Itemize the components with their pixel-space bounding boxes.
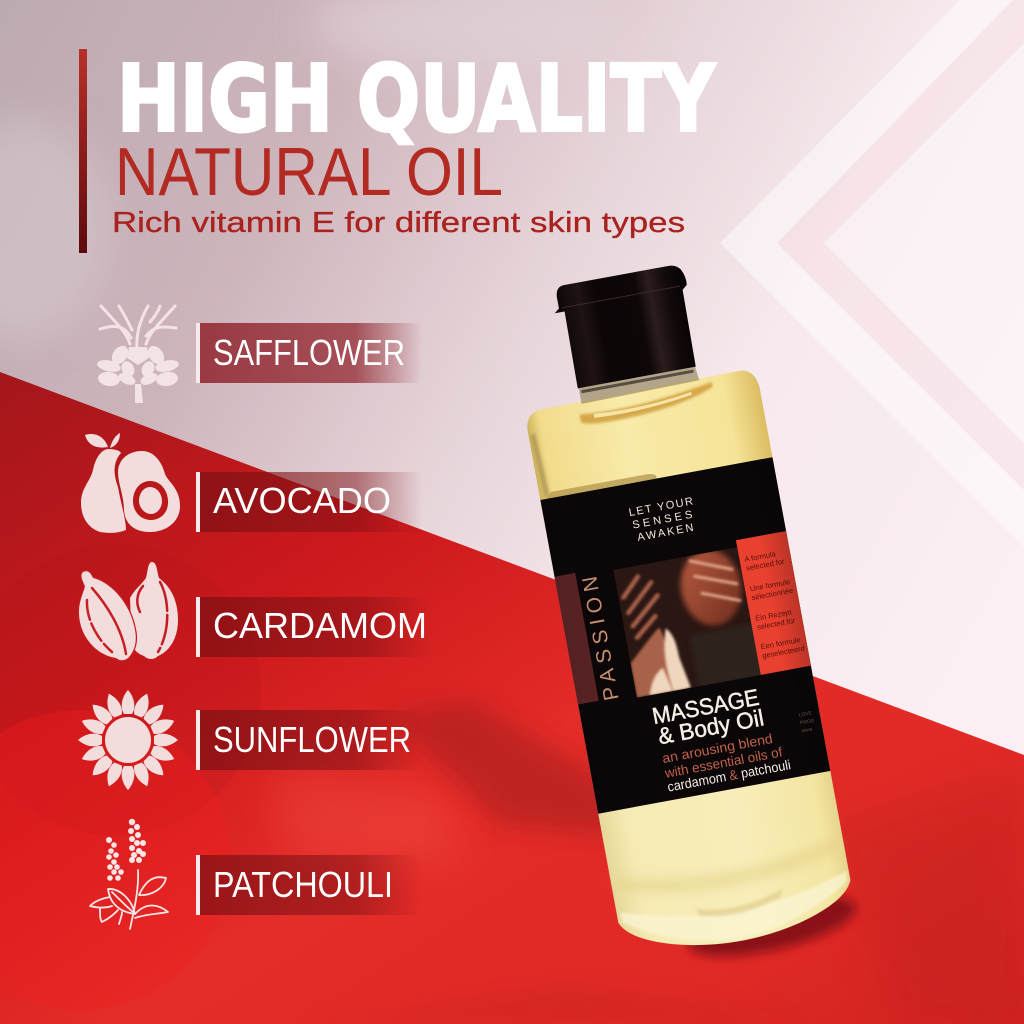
label bar: avocado	[196, 472, 422, 532]
label: description	[660, 729, 792, 795]
icon: avocado	[81, 433, 180, 533]
label bar: sunflower	[196, 710, 422, 770]
icon: sunflower	[78, 690, 178, 790]
label: multilingual red panel: Ein Rezept	[755, 607, 793, 623]
label: side small print	[798, 710, 817, 734]
bottle body	[521, 354, 858, 962]
label: product name: MASSAGE	[650, 684, 761, 729]
label: description: cardamom & patchouli	[666, 757, 792, 795]
ingredient: cardamom	[79, 562, 432, 660]
label: side small print: www	[801, 726, 813, 734]
label: multilingual red panel: selected für	[756, 616, 796, 632]
label: photo	[614, 547, 760, 698]
title block	[79, 46, 716, 253]
ingredient: avocado	[81, 433, 422, 533]
icon: patchouli	[90, 819, 168, 929]
label bar: patchouli	[196, 855, 422, 915]
label: description: an arousing blend	[661, 731, 774, 766]
label: product name: & Body Oil	[656, 704, 766, 749]
label: multilingual red panel: sélectionnée	[751, 586, 794, 602]
label: side small print: PROD	[800, 718, 815, 727]
label: tagline	[628, 495, 700, 545]
label: tagline: AWAKEN	[636, 521, 696, 544]
heading: high quality: QUALITY	[357, 46, 716, 152]
heading: natural oil: NATURAL OIL	[115, 134, 503, 210]
label: multilingual red panel	[736, 531, 811, 675]
heading: high quality: HIGH	[117, 46, 333, 152]
label: multilingual red panel: Een formule	[760, 635, 801, 651]
product label	[540, 457, 830, 814]
label: multilingual red panel: geselecteerd	[762, 644, 805, 660]
ingredient: safflower	[96, 306, 422, 403]
label: tagline: LET YOUR	[628, 495, 696, 519]
label bar: cardamom: CARDAMOM	[213, 605, 427, 646]
label: product name	[650, 684, 766, 750]
label: description: with essential oils of	[663, 744, 784, 781]
label bar: safflower: SAFFLOWER	[213, 332, 405, 373]
ingredient: patchouli	[90, 819, 422, 929]
title accent bar	[79, 49, 87, 253]
subheading: Rich vitamin E for different skin types	[112, 207, 685, 239]
icon: safflower	[96, 306, 180, 403]
label: passion strip	[555, 573, 599, 705]
label: multilingual red panel: selected for	[745, 557, 786, 573]
label: side small print: LOVE	[798, 710, 813, 719]
label bar: safflower	[196, 323, 422, 383]
label bar: sunflower: SUNFLOWER	[213, 719, 411, 760]
label bar: cardamom	[196, 597, 432, 657]
background: red diagonal surface	[0, 372, 1024, 1024]
label: multilingual red panel: Une formule	[749, 577, 791, 593]
ingredient: sunflower	[78, 690, 422, 790]
icon: cardamom	[79, 562, 178, 660]
label bar: patchouli: PATCHOULI	[213, 864, 393, 905]
bottle neck ring	[574, 362, 716, 427]
label bar: avocado: AVOCADO	[213, 480, 391, 521]
product: oil bottle	[527, 266, 850, 946]
label: multilingual red panel: A formula	[744, 549, 777, 564]
label: passion text: PASSION	[578, 572, 624, 702]
bottle cap	[550, 263, 702, 390]
label: tagline: SENSES	[632, 508, 697, 532]
